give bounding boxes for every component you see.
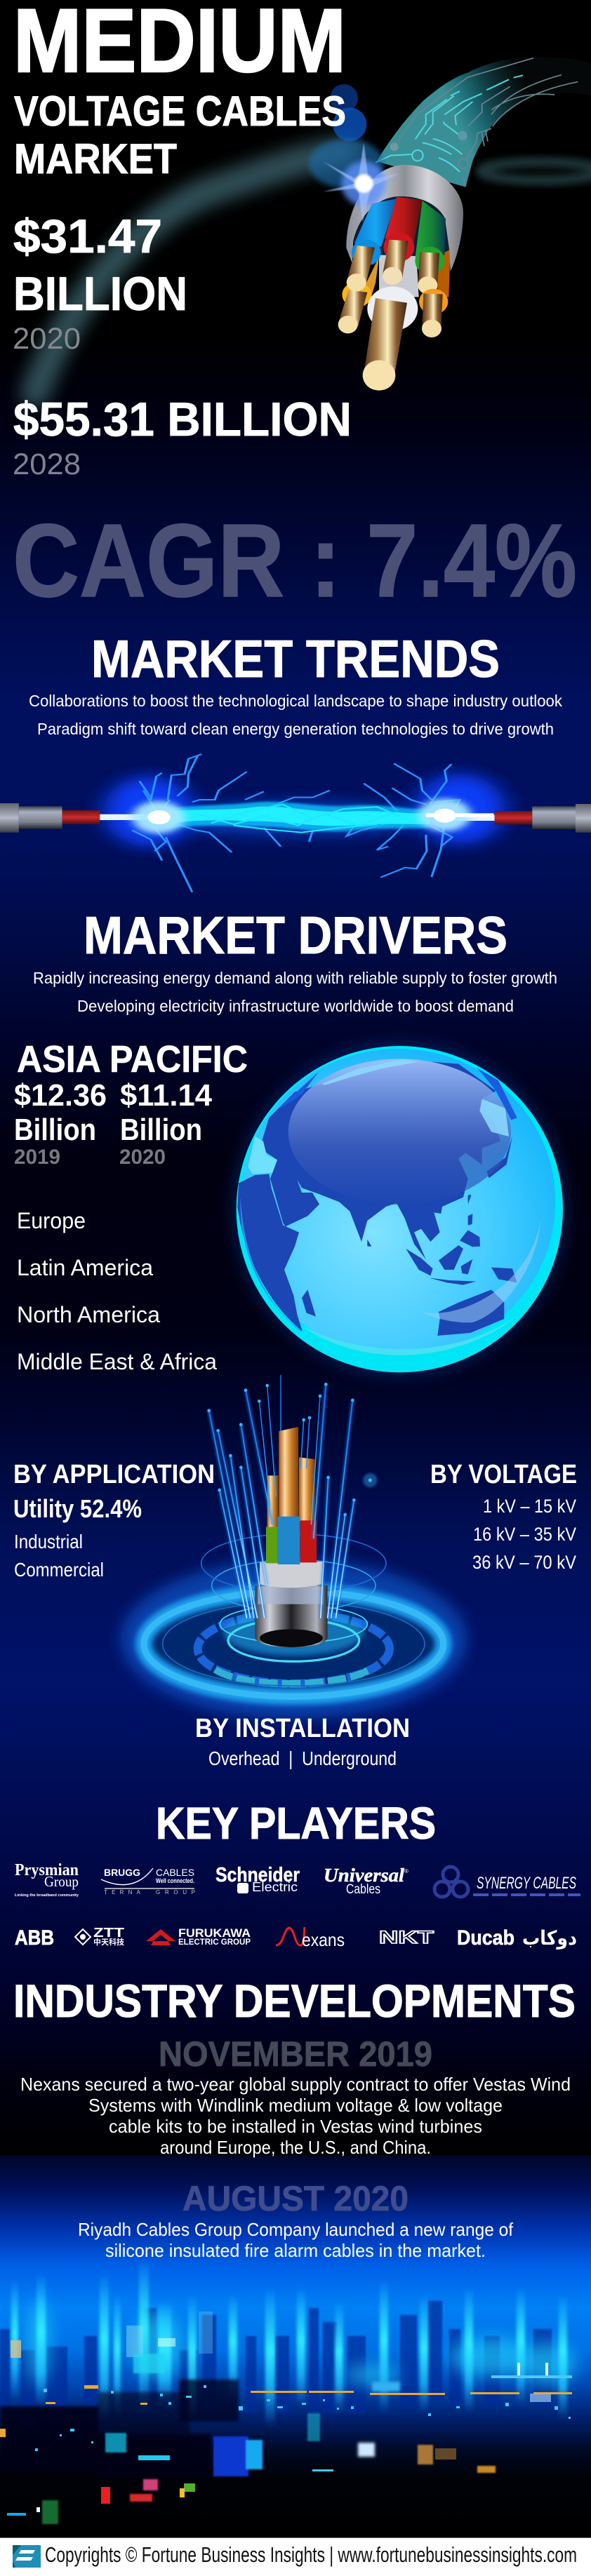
- logo: Brugg Cables: GROUP: [156, 1889, 195, 1896]
- footer bar: [0, 2537, 591, 2576]
- segment: by application: Utility 52.4%: [13, 1494, 142, 1523]
- development: August 2020: silicone insulated fire alarm cables in the market.: [105, 2240, 486, 2261]
- development: November 2019: Nexans secured a two-year global supply contract to offer Vestas Wind: [20, 2074, 571, 2095]
- logo: Ducab: [457, 1926, 577, 1950]
- development: November 2019: NOVEMBER 2019: [159, 2034, 432, 2074]
- regions list: Middle East & Africa: [17, 1349, 217, 1374]
- development: November 2019: Systems with Windlink medium voltage & low voltage: [88, 2095, 503, 2116]
- heading: market drivers: MARKET DRIVERS: [84, 906, 507, 965]
- white collar: [260, 1562, 323, 1588]
- Asia Pacific 2019 value: $12.36: [14, 1078, 107, 1113]
- copper rods: [267, 1427, 315, 1528]
- distant building silhouettes: [0, 2301, 552, 2427]
- segment: by voltage: 36 kV – 70 kV: [472, 1552, 576, 1573]
- globe: [231, 1040, 568, 1377]
- logo: Brugg Cables: Well connected.: [156, 1877, 194, 1884]
- segment: by voltage: 1 kV – 15 kV: [483, 1496, 576, 1517]
- segment: by installation: BY INSTALLATION: [195, 1714, 410, 1743]
- regions list: Europe: [17, 1208, 86, 1233]
- logos: key players row one: [15, 1861, 580, 1898]
- north east rim land: [476, 1068, 517, 1120]
- Japan: [486, 1136, 512, 1178]
- left wire: [0, 803, 151, 833]
- bright contact points: [132, 798, 493, 833]
- logo: ZTT: ZTT: [93, 1926, 124, 1940]
- logos: key players row two: [15, 1926, 577, 1950]
- illustration: electric arc between two wires: [0, 754, 591, 892]
- heading: Asia Pacific: [14, 1038, 248, 1169]
- development: August 2020: [78, 2179, 514, 2261]
- logo: NKT: NKT: [379, 1928, 434, 1947]
- cable sheath with circuit traces: [376, 57, 591, 187]
- right wire: [452, 804, 591, 833]
- cable lower sheath: [255, 1585, 328, 1647]
- logo: Schneider Electric: [215, 1864, 300, 1894]
- faint background cable arc: [35, 151, 591, 393]
- Africa land mass: [237, 1174, 303, 1331]
- bright towers and buildings: [11, 2312, 572, 2476]
- logo: Prysmian Group: [15, 1861, 79, 1898]
- Indian Ocean and Pacific islands: [302, 1195, 517, 1336]
- colourful neon signs: [7, 2479, 195, 2524]
- north coast light land: [321, 1059, 509, 1136]
- orange conductor tip: [419, 289, 448, 337]
- logo: Universal Cables: [324, 1865, 409, 1897]
- city skyline background: [0, 2155, 591, 2537]
- cyan haze: [27, 2301, 576, 2385]
- north west rim land: [279, 1072, 318, 1108]
- insulated conductors: [266, 1517, 317, 1564]
- stat: 2028 market size: [13, 393, 352, 481]
- Europe: [248, 1136, 277, 1174]
- inner bottom light band: [302, 1314, 519, 1355]
- translucent polar highlight: [288, 1059, 511, 1205]
- platform disc: [144, 1591, 444, 1696]
- logo: ABB: ABB: [15, 1926, 54, 1950]
- logo: Synergy Cables: [434, 1867, 580, 1897]
- segment: by application: [13, 1460, 215, 1581]
- white centre conductor: [363, 255, 419, 391]
- globe rim: [237, 1046, 563, 1372]
- lower right crescent highlight: [423, 1221, 541, 1322]
- lower teal segments: [215, 1670, 370, 1684]
- scattered window lights: [35, 2385, 571, 2471]
- segment: by application: Commercial: [14, 1559, 104, 1581]
- illustration: medium voltage cable with exposed conductors: [309, 57, 591, 391]
- market drivers text: [33, 969, 557, 1015]
- logo: Universal Cables: ®: [404, 1868, 409, 1874]
- ocean: [241, 1049, 555, 1355]
- foreground dark mass: [0, 2380, 239, 2476]
- segment: by voltage: [430, 1460, 577, 1573]
- development: August 2020: AUGUST 2020: [182, 2179, 409, 2218]
- logo: ZTT: [75, 1926, 124, 1947]
- red conductor: [383, 197, 423, 285]
- logo: Universal Cables: Cables: [346, 1882, 380, 1897]
- Asia Pacific 2019 value: Billion: [14, 1113, 96, 1147]
- yellow bridge lights: [0, 2385, 572, 2437]
- market trends text: Paradigm shift toward clean energy generation technologies to drive growth: [37, 720, 554, 738]
- cyan centre glow: [223, 1609, 364, 1656]
- glowing main ring: [144, 1591, 444, 1696]
- bright star flare: [323, 142, 400, 222]
- market trends text: [29, 692, 562, 738]
- regions list: Latin America: [17, 1255, 153, 1280]
- logo: Brugg Cables: TERNA: [104, 1889, 141, 1896]
- logo: Universal Cables: Universal: [324, 1865, 405, 1886]
- segment: by application: BY APPLICATION: [13, 1460, 215, 1489]
- inner rings: [163, 1534, 425, 1686]
- orange back conductor: [437, 221, 451, 297]
- Asia Pacific 2020 value: $11.14: [120, 1078, 213, 1113]
- yellow back conductor: [338, 257, 379, 333]
- heading: Asia Pacific: ASIA PACIFIC: [17, 1038, 248, 1080]
- lightning bolts: [132, 754, 460, 892]
- stat: 2020 market size: $31.47: [13, 210, 162, 263]
- platform glow: [121, 1559, 467, 1719]
- logo: Nexans: [276, 1927, 345, 1950]
- market drivers text: Rapidly increasing energy demand along with reliable supply to foster growth: [33, 969, 557, 987]
- glow: [104, 774, 505, 847]
- development: November 2019: [20, 2034, 571, 2158]
- title: VOLTAGE CABLES: [14, 88, 346, 135]
- logo: Ducab: دوكاب: [522, 1926, 577, 1950]
- logo: Prysmian Group: Linking the broadband community: [15, 1893, 79, 1898]
- title: MARKET: [14, 135, 177, 182]
- Asia land mass: [260, 1059, 500, 1259]
- development: November 2019: around Europe, the U.S., and China.: [160, 2137, 431, 2158]
- stat: 2028 market size: $55.31 BILLION: [13, 393, 352, 446]
- segment: by installation: [195, 1714, 410, 1769]
- Asia Pacific 2020 value: Billion: [120, 1113, 202, 1147]
- light beams: [11, 2259, 567, 2427]
- logo: Brugg Cables: BRUGG: [104, 1867, 140, 1878]
- left crescent highlight: [241, 1198, 303, 1331]
- segment: by application: Industrial: [14, 1531, 83, 1552]
- stat: 2020 market size: [13, 210, 187, 356]
- heading: key players: KEY PLAYERS: [156, 1798, 436, 1849]
- Asia Pacific 2019 value: 2019: [14, 1146, 60, 1169]
- regions list: North America: [17, 1302, 160, 1327]
- development: August 2020: Riyadh Cables Group Company launched a new range of: [78, 2219, 514, 2240]
- Asia Pacific 2020 value: 2020: [119, 1146, 166, 1169]
- logo: Schneider Electric: Schneider: [215, 1864, 300, 1886]
- stat: 2028 market size: 2028: [13, 448, 81, 481]
- stat: 2020 market size: BILLION: [13, 267, 187, 321]
- Asia Pacific 2019 value: [14, 1078, 107, 1169]
- heading: market trends: MARKET TRENDS: [91, 629, 500, 688]
- fibre optic beams: [209, 1375, 354, 1618]
- logo: ZTT: 中天科技: [93, 1937, 124, 1947]
- logo: Prysmian Group: Prysmian: [15, 1861, 79, 1879]
- logo: Brugg Cables: CABLES: [156, 1867, 194, 1878]
- fibre beam glow: [209, 1384, 354, 1618]
- logo: Furukawa Electric Group: [146, 1926, 251, 1947]
- green conductor: [415, 201, 446, 294]
- logo: Furukawa Electric Group: FURUKAWA: [178, 1926, 251, 1940]
- market drivers text: Developing electricity infrastructure worldwide to boost demand: [77, 997, 514, 1015]
- icon: Fortune Business Insights logo: [13, 2545, 41, 2568]
- illustration: cable core with fibre beams on glowing platform: [121, 1375, 467, 1719]
- segment: by installation: Overhead | Underground: [208, 1747, 397, 1769]
- development: November 2019: cable kits to be installed in Vestas wind turbines: [109, 2116, 482, 2137]
- logo: Furukawa Electric Group: ELECTRIC GROUP: [178, 1937, 251, 1947]
- regions list: [17, 1208, 217, 1374]
- blue conductor: [347, 199, 397, 291]
- globe glow: [231, 1040, 568, 1377]
- logo: Nexans: exans: [302, 1929, 345, 1950]
- segmented ring: [198, 1614, 390, 1684]
- market trends text: Collaborations to boost the technological landscape to shape industry outlook: [29, 692, 562, 710]
- logo: Prysmian Group: Group: [44, 1873, 79, 1890]
- blue lens flare: [309, 84, 384, 188]
- logo: Brugg Cables: [101, 1867, 195, 1896]
- stat: 2020 market size: 2020: [13, 322, 81, 356]
- fibre tips: [207, 1383, 377, 1516]
- Asia Pacific 2020 value: [119, 1078, 213, 1169]
- dark collar opening: [353, 196, 449, 264]
- segment: by voltage: 16 kV – 35 kV: [473, 1524, 576, 1545]
- central plasma: [166, 802, 430, 833]
- title: [13, 0, 346, 182]
- logo: Schneider Electric: Electric: [252, 1880, 298, 1894]
- silver collar: [346, 165, 463, 271]
- logo: Ducab: Ducab: [457, 1926, 514, 1950]
